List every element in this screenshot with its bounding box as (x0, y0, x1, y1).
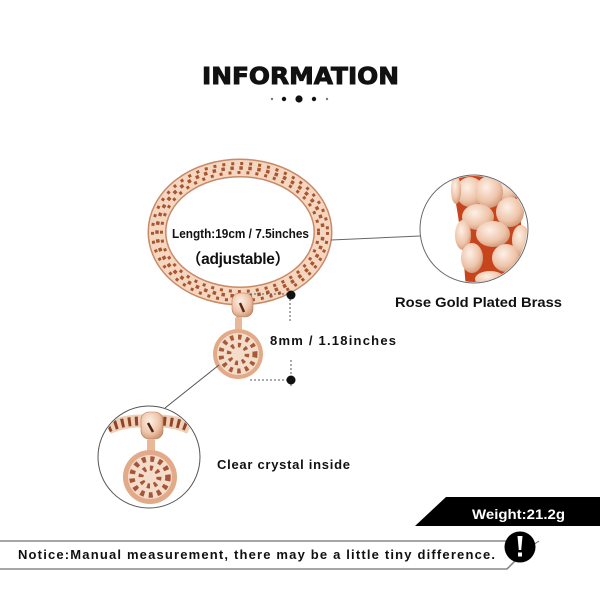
material label: Rose Gold Plated Brass (395, 295, 562, 310)
detail circle: chain close-up (420, 172, 530, 290)
weight banner (415, 497, 600, 526)
notice bar (0, 541, 539, 569)
adjustable label: （adjustable） (186, 251, 290, 268)
length label: Length:19cm / 7.5inches (172, 227, 309, 241)
measurement label: 8mm / 1.18inches (270, 333, 396, 348)
title: INFORMATION (202, 64, 399, 90)
crystal label: Clear crystal inside (217, 457, 350, 472)
pendant bail (232, 293, 253, 330)
measurement marker: bottom (250, 360, 296, 388)
pendant charm (213, 329, 263, 379)
bracelet (152, 164, 328, 300)
measurement marker: top (250, 290, 296, 322)
leader line: right callout (331, 236, 420, 240)
notice bar: Notice:Manual measurement, there may be a little tiny difference. (18, 547, 495, 562)
detail circle: charm close-up (98, 406, 200, 508)
weight banner: Weight:21.2g (472, 506, 565, 522)
icon: exclamation (504, 532, 536, 562)
title dots (271, 95, 328, 103)
leader line: left callout (165, 365, 219, 408)
